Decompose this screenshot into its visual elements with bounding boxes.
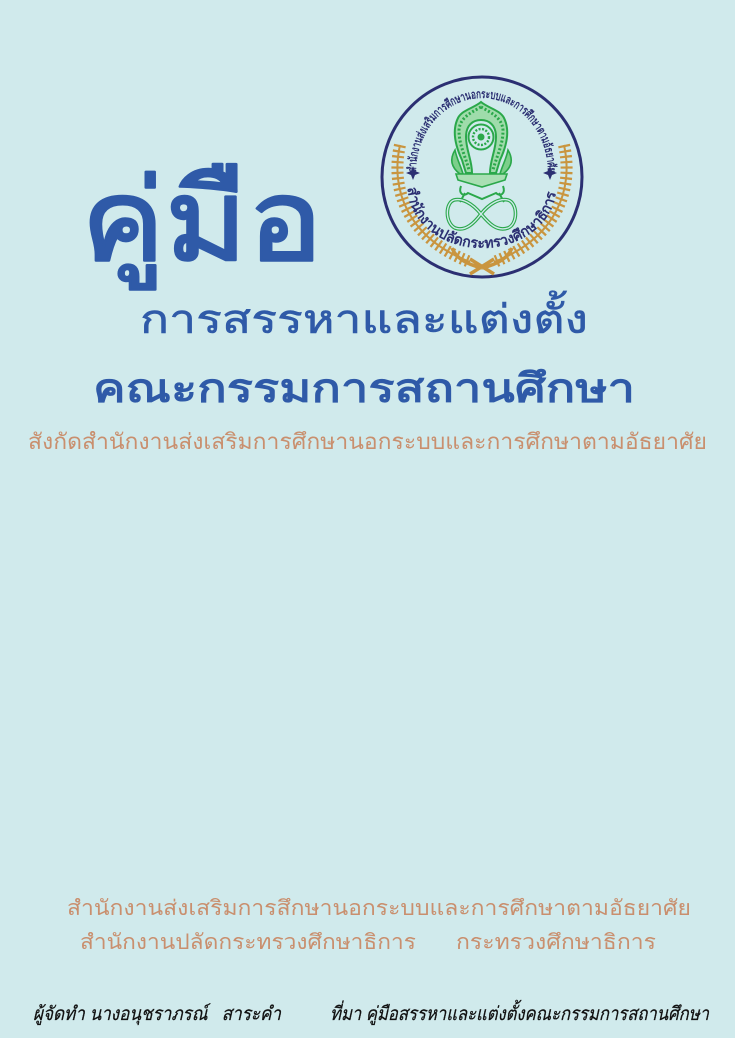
footer: permanent secretary office and ministry: กระทรวงศึกษาธิการ [456, 931, 656, 954]
logo outer ring [382, 77, 582, 277]
logo top arc text: สำนักงานส่งเสริมการศึกษานอกระบบและการศึกษาตามอัธยาศัย [406, 91, 558, 172]
footer: office name: สำนักงานส่งเสริมการสึกษานอกระบบและการศึกษาตามอัธยาศัย [67, 897, 691, 920]
logo bottom arc text: สำนักงานปลัดกระทรวงศึกษาธิการ [407, 187, 556, 248]
heading: school committee: คณะกรรมการสถานศึกษา [93, 367, 635, 411]
logo: seal of the office [380, 76, 584, 278]
footer: permanent secretary office and ministry: สำนักงานปลัดกระทรวงศึกษาธิการ [80, 931, 416, 954]
logo side ornaments [406, 166, 557, 180]
credit: author: ผู้จัดทำ นางอนุชราภรณ์ สาระคำ [33, 1003, 282, 1025]
logo green emblem [447, 102, 516, 229]
footer: permanent secretary office and ministry [80, 931, 656, 954]
logo wheat laurel [397, 145, 567, 274]
heading: recruitment and appointment: การสรรหาและแต่งตั้ง [140, 290, 588, 342]
subtitle: affiliation: สังกัดสำนักงานส่งเสริมการศึกษานอกระบบและการศึกษาตามอัธยาศัย [28, 429, 707, 454]
title: manual: คู่มือ [81, 158, 323, 290]
